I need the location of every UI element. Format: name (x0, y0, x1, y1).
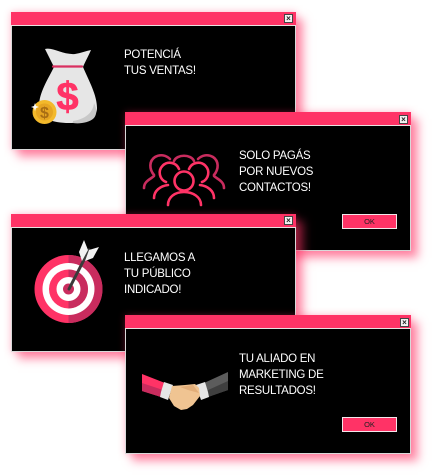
icon: money bag (31, 48, 97, 124)
title bar (11, 214, 296, 228)
text: tu aliado: MARKETING DE (239, 369, 324, 381)
text: solo pagás: CONTACTOS! (239, 182, 311, 194)
text: solo pagás (239, 148, 313, 194)
OK button (342, 214, 397, 229)
icon: group of people (142, 154, 226, 206)
icon: money bag: $ (56, 75, 79, 119)
icon: handshake (142, 372, 228, 410)
close button: × (286, 14, 291, 23)
icon: target with arrow (34, 240, 102, 323)
title bar (11, 12, 296, 26)
OK button (342, 417, 397, 432)
title bar (125, 112, 411, 126)
close button (400, 318, 409, 327)
icon: money bag: $ (40, 105, 49, 122)
close button (284, 14, 293, 23)
title bar (125, 315, 411, 329)
OK button: OK (364, 420, 375, 429)
text: solo pagás: SOLO PAGÁS (239, 150, 310, 162)
text: potenciá: TUS VENTAS! (124, 65, 196, 77)
text: potenciá: POTENCIÁ (124, 49, 181, 61)
close button (399, 115, 408, 124)
window: solo pagás (125, 112, 411, 251)
text: llegamos a (124, 252, 196, 296)
OK button: OK (364, 217, 375, 226)
close button: × (286, 216, 291, 225)
text: llegamos a: TU PÚBLICO (124, 268, 191, 280)
window: potenciá tus ventas (11, 12, 296, 150)
text: tu aliado (239, 353, 324, 397)
window: tu aliado (125, 315, 411, 454)
window: llegamos a tu público (11, 214, 296, 352)
text: tu aliado: RESULTADOS! (239, 385, 316, 397)
close button: × (402, 318, 407, 327)
close button: × (401, 115, 406, 124)
text: potenciá (124, 48, 196, 77)
text: llegamos a: LLEGAMOS A (124, 252, 195, 264)
text: solo pagás: POR NUEVOS (239, 166, 313, 178)
close button (284, 216, 293, 225)
text: llegamos a: INDICADO! (124, 284, 181, 296)
text: tu aliado: TU ALIADO EN (239, 353, 315, 365)
